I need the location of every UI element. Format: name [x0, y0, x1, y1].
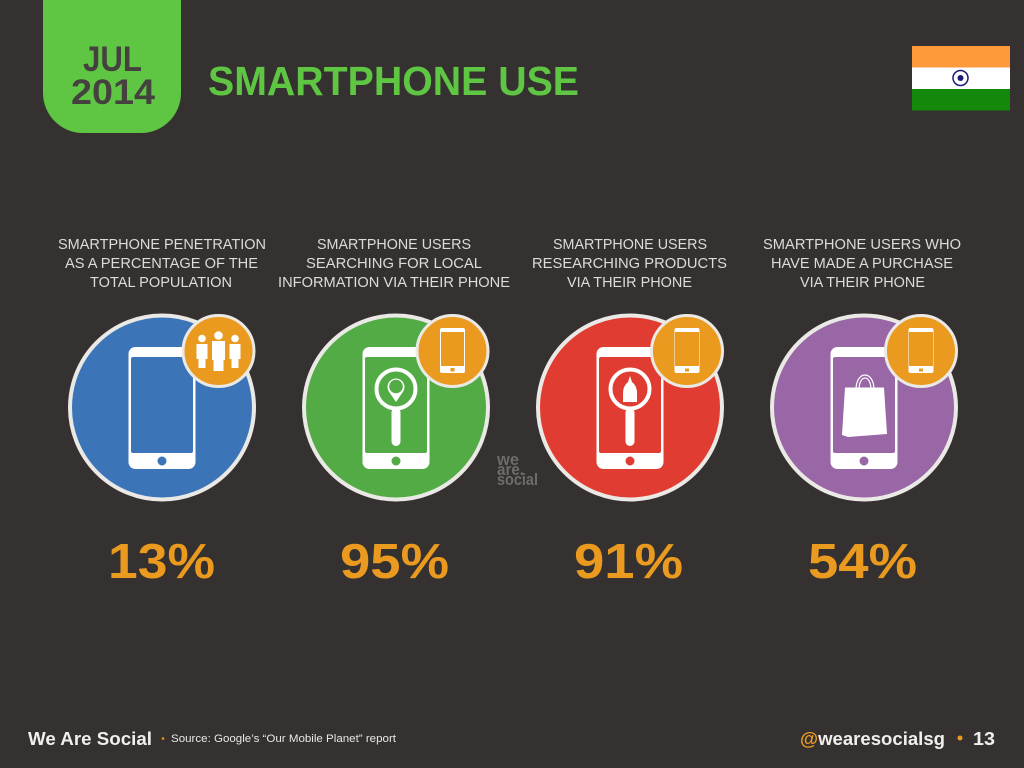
label: local search: SMARTPHONE USERS — [317, 236, 471, 253]
watermark: we are social: are. — [497, 460, 524, 479]
value: 13%: 13% — [108, 535, 215, 589]
label: penetration: SMARTPHONE PENETRATION — [58, 236, 266, 253]
circle icon: phone on blue — [70, 316, 254, 500]
panel: smartphone penetration — [58, 236, 266, 589]
label: mobile purchase — [763, 236, 961, 291]
panel: product research — [532, 236, 727, 589]
circle icon: phone with location magnifier — [304, 316, 488, 500]
badge: phone — [886, 316, 956, 386]
label: local search: SEARCHING FOR LOCAL — [306, 255, 482, 272]
label: penetration: TOTAL POPULATION — [90, 274, 232, 291]
footer handle and page number: @wearesocialsg — [800, 729, 945, 749]
date tab — [43, 0, 181, 133]
watermark: we are social: we — [496, 450, 519, 469]
badge: phone — [417, 316, 488, 386]
panel: mobile purchase — [763, 236, 961, 589]
watermark: we are social — [496, 450, 538, 489]
label: product research: SMARTPHONE USERS — [553, 236, 707, 253]
footer handle and page number: 13 — [973, 729, 995, 749]
badge: phone — [652, 316, 722, 386]
title: SMARTPHONE USE — [208, 58, 579, 104]
label: mobile purchase: SMARTPHONE USERS WHO — [763, 236, 961, 253]
label: product research: VIA THEIR PHONE — [567, 274, 692, 291]
label: product research: RESEARCHING PRODUCTS — [532, 255, 727, 272]
circle icon: phone with product magnifier — [538, 316, 722, 500]
label: local search — [278, 236, 510, 291]
panel: local information search — [278, 236, 510, 589]
date tab: 2014 — [71, 73, 156, 112]
flag: India — [912, 46, 1010, 110]
value: 91%: 91% — [574, 535, 683, 589]
badge: people — [183, 316, 254, 386]
circle icon: phone with shopping bag — [772, 316, 956, 500]
label: local search: INFORMATION VIA THEIR PHONE — [278, 274, 510, 291]
date tab: JUL — [83, 40, 142, 79]
label: mobile purchase: HAVE MADE A PURCHASE — [771, 255, 953, 272]
label: penetration — [58, 236, 266, 291]
label: penetration: AS A PERCENTAGE OF THE — [65, 255, 258, 272]
value: 54%: 54% — [808, 535, 917, 589]
watermark: we are social: social — [497, 470, 538, 489]
footer source: Source: Google’s “Our Mobile Planet” report — [171, 733, 396, 745]
label: mobile purchase: VIA THEIR PHONE — [800, 274, 925, 291]
label: product research — [532, 236, 727, 291]
footer brand: We Are Social — [28, 729, 152, 749]
value: 95%: 95% — [340, 535, 449, 589]
